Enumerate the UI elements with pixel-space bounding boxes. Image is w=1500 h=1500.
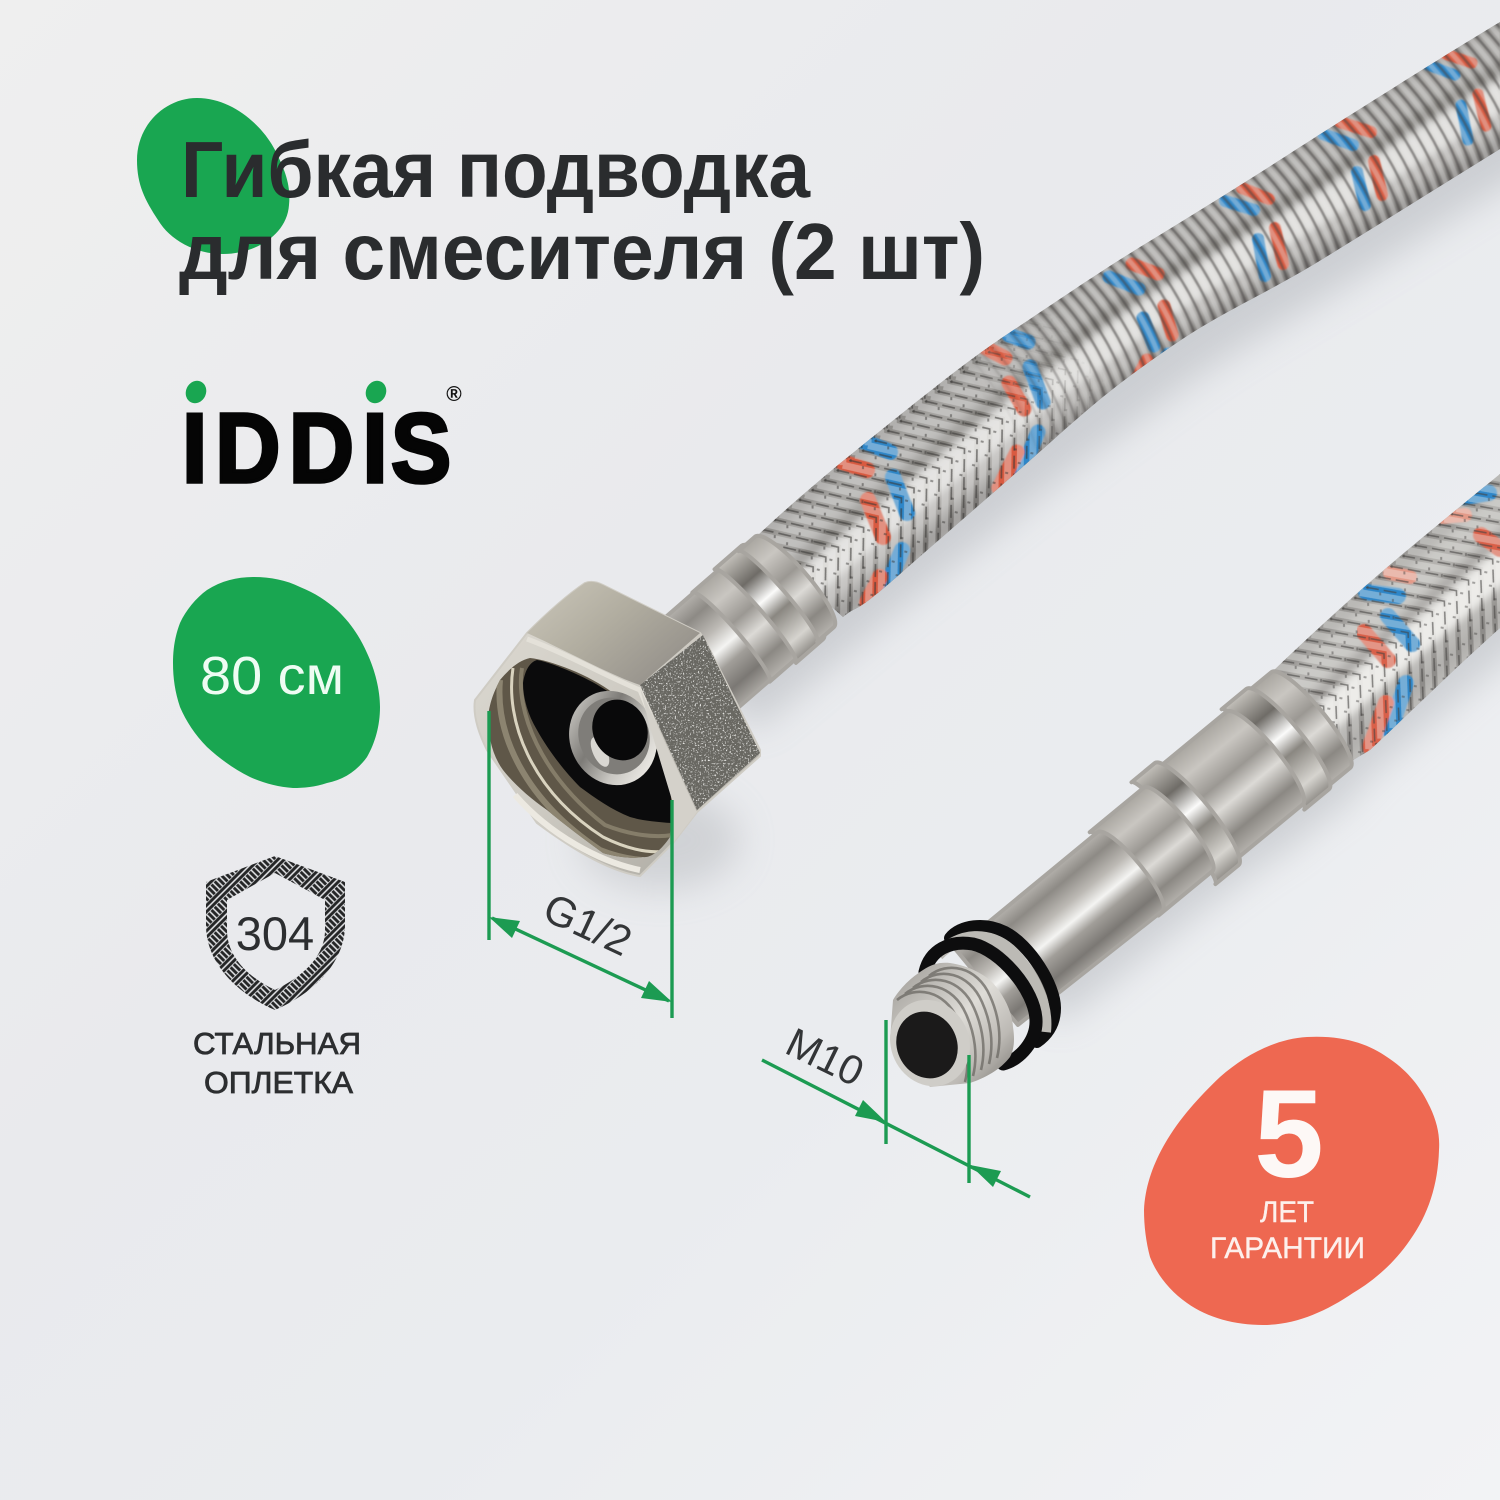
- shield outline: [206, 856, 345, 1010]
- upper braided hose: [759, 22, 1500, 617]
- upper fitting collar: [615, 526, 846, 749]
- O-ring back: [950, 926, 1055, 1042]
- nut lower bevel: [640, 688, 697, 843]
- bore hole: [582, 690, 658, 770]
- logo dot left: [182, 377, 210, 407]
- logo wordmark: IDDIS: [182, 394, 451, 503]
- collar body: [692, 558, 809, 682]
- O-ring front: [925, 943, 1036, 1064]
- warranty caption line 2: ГАРАНТИИ: [1210, 1232, 1365, 1265]
- registered mark: ®: [446, 383, 462, 406]
- G1/2 label: G1/2: [537, 884, 639, 965]
- black rubber seal: [523, 660, 672, 823]
- lower fitting body: [945, 660, 1364, 1038]
- collar shank: [618, 581, 783, 746]
- lower metal shading: [1286, 490, 1500, 751]
- lower collar bead: [1222, 680, 1340, 810]
- title: [179, 125, 985, 296]
- M10 label: M10: [779, 1019, 871, 1095]
- arrowhead left: [855, 1100, 886, 1122]
- ring reflection: [587, 735, 613, 769]
- warranty caption line 1: ЛЕТ: [1260, 1196, 1314, 1229]
- arrowhead right: [970, 1165, 1001, 1187]
- arrowhead right: [641, 981, 672, 1002]
- nut top facet: [527, 582, 700, 685]
- nut body: [474, 582, 760, 876]
- lower collar body: [1157, 703, 1313, 862]
- badge: length: [173, 577, 380, 788]
- arrowhead left: [489, 917, 520, 938]
- braid texture near fitting: [760, 313, 1097, 617]
- hex nut with G1/2 thread: [474, 582, 760, 876]
- hose shadows: [580, 104, 1500, 1000]
- thread highlights: [512, 668, 672, 852]
- nut textured facet: [640, 635, 760, 810]
- green blob behind title: [137, 98, 289, 254]
- ring inner wall: [566, 686, 662, 786]
- warranty number: 5: [1254, 1065, 1324, 1204]
- braid caption: СТАЛЬНАЯ: [193, 1026, 361, 1061]
- title: Гибкая подводка: [181, 125, 810, 214]
- title: для смесителя (2 шт): [179, 207, 985, 296]
- metal ring: [554, 676, 672, 800]
- braid caption line 2: ОПЛЕТКА: [204, 1065, 353, 1100]
- O-rings and male M10 thread: [876, 926, 1055, 1099]
- groove: [938, 937, 1045, 1032]
- length value: 80 см: [200, 646, 344, 706]
- icon: steel braid shield: [193, 856, 361, 1100]
- male thread: [890, 963, 1014, 1087]
- lower braid texture: [1275, 474, 1500, 760]
- logo dot right: [362, 377, 390, 407]
- dimension: M10: [762, 1019, 1030, 1197]
- green blob: [173, 577, 380, 788]
- lower collar crimp: [1242, 663, 1361, 792]
- badge: warranty: [1144, 1037, 1439, 1325]
- end ring: [876, 987, 984, 1099]
- IDDIS logo: [182, 377, 462, 503]
- red blob: [1144, 1037, 1439, 1325]
- rim highlight: [527, 639, 690, 812]
- lower braided hose: [1274, 474, 1500, 760]
- internal thread and seal: [488, 658, 672, 858]
- metal shading bands: [770, 27, 1500, 617]
- end bore: [885, 1002, 969, 1088]
- dimension: G1/2: [489, 711, 672, 1018]
- collar crimp: [739, 527, 844, 642]
- extension lines and dimension line: [489, 711, 672, 1018]
- braid texture far section: [980, 23, 1500, 444]
- lower lip highlight: [515, 795, 640, 870]
- grade number: 304: [236, 907, 314, 960]
- lower marker threads: [1364, 493, 1500, 747]
- hex shoulder: [1090, 780, 1222, 916]
- thread ridges: [897, 968, 999, 1082]
- extension lines and dimension line: [762, 1020, 1030, 1197]
- collar bead: [715, 536, 834, 663]
- blue and red marker threads: [842, 54, 1486, 603]
- lower flange bead: [1131, 754, 1249, 884]
- tube: [956, 825, 1172, 1028]
